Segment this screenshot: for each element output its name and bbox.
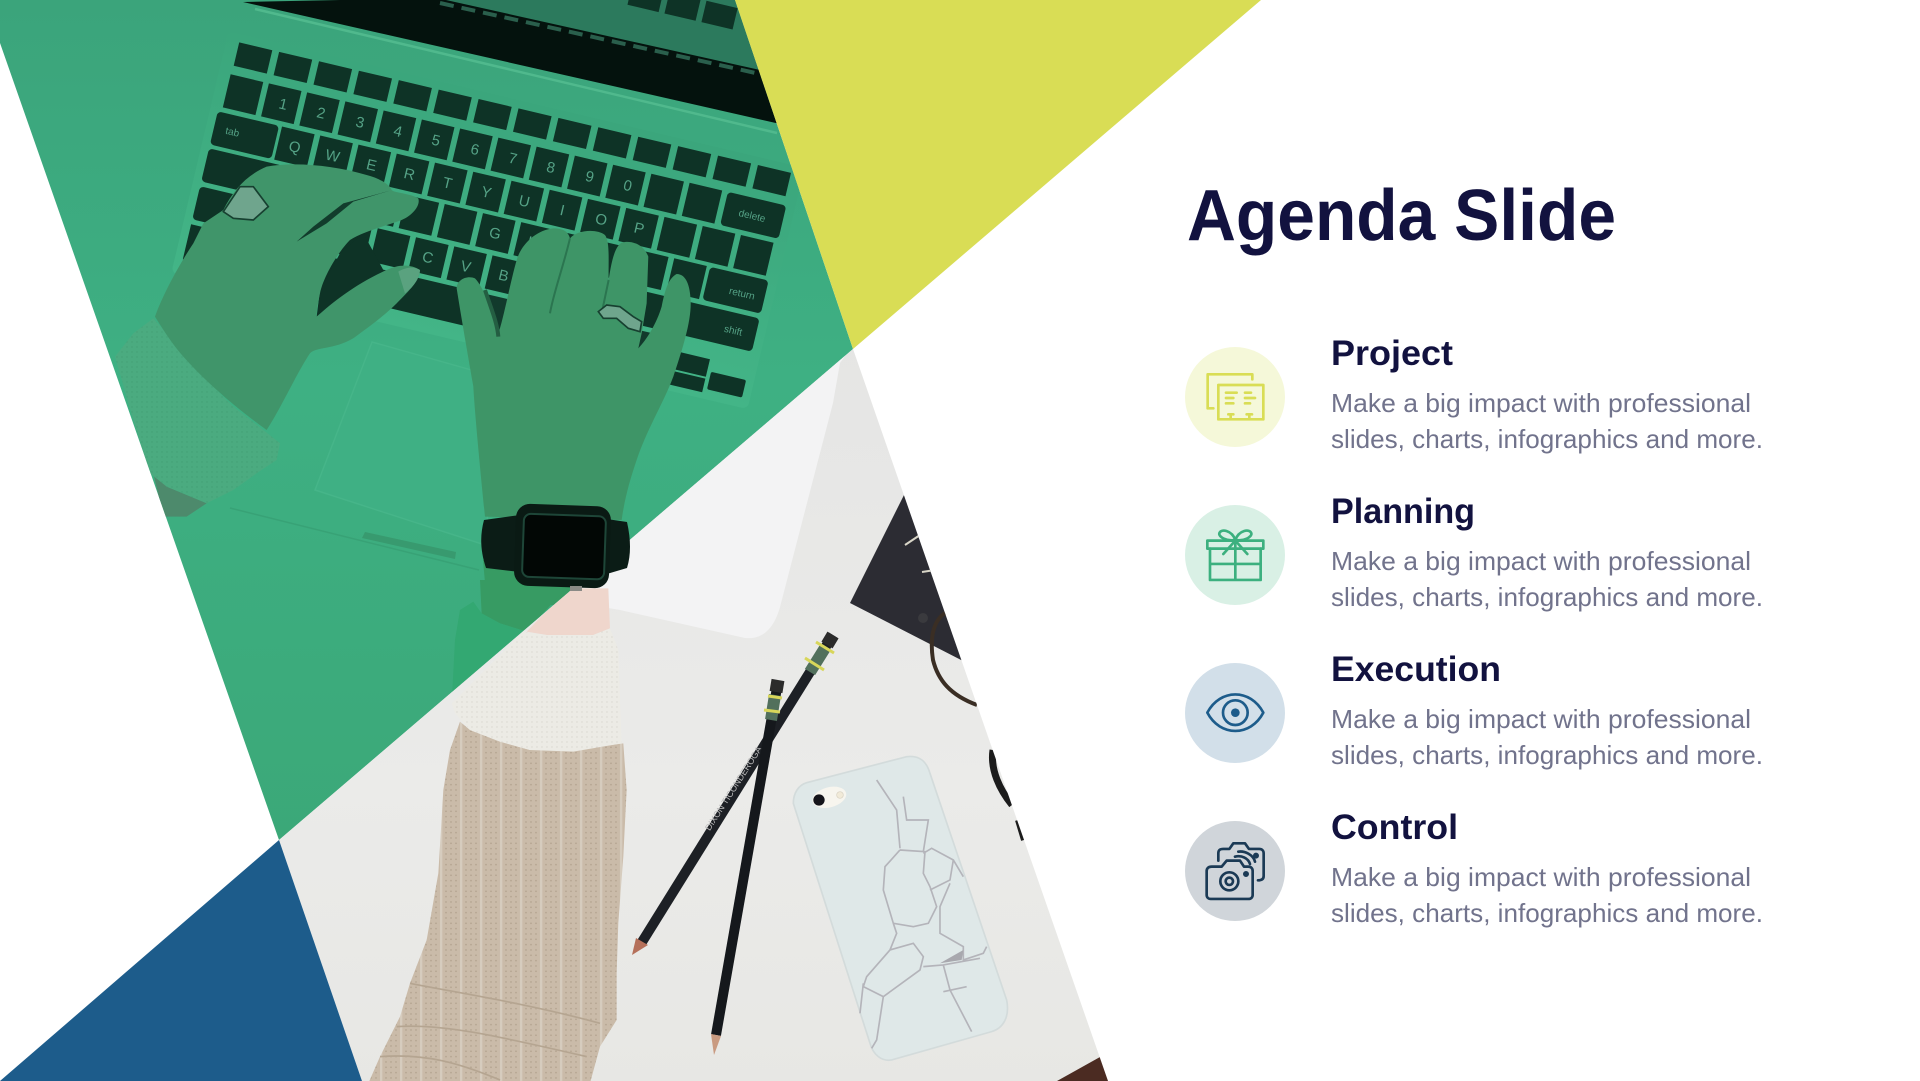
left hand — [155, 164, 420, 430]
left ring — [223, 187, 268, 220]
icon: project cards — [1185, 347, 1285, 447]
description: Planning: slides, charts, infographics and more. — [1331, 582, 1763, 612]
icon: cameras — [1185, 821, 1285, 921]
laptop screen hinge band — [243, 0, 780, 133]
heading: Planning: Planning — [1331, 492, 1475, 531]
green wrist and cuff — [452, 580, 550, 692]
keycap letters: return — [728, 286, 756, 303]
pencil 1: DIXON TICONDEROGA — [703, 744, 764, 832]
smartwatch — [481, 503, 630, 591]
keycap letters: shift — [723, 324, 743, 339]
laptop front edge — [230, 508, 479, 570]
brown desk object corner — [1057, 1057, 1108, 1081]
keycap letters: 1234567890 — [277, 95, 634, 195]
keycap letters — [226, 99, 765, 336]
agenda item: Execution — [1185, 650, 1763, 770]
description: Planning: Make a big impact with professional — [1331, 546, 1751, 576]
pencil 2 — [711, 680, 782, 1055]
icon: eye — [1185, 663, 1285, 763]
heading: Project: Project — [1331, 334, 1453, 373]
heading: Execution: Execution — [1331, 650, 1501, 689]
left sleeve — [115, 318, 280, 517]
title: Agenda Slide — [1187, 176, 1616, 256]
phone with marble case — [793, 756, 1008, 1060]
keycap letters: delete — [737, 208, 767, 225]
description: Planning — [1331, 546, 1763, 612]
description: Control: slides, charts, infographics and more. — [1331, 898, 1763, 928]
forearm below watch — [483, 560, 570, 605]
panel: natural colour lower photo section — [279, 349, 1108, 1081]
blue triangle — [0, 840, 362, 1081]
keycap letters: QWERTYUIOP — [287, 138, 646, 238]
description: Project: slides, charts, infographics and more. — [1331, 424, 1763, 454]
yellow triangle — [735, 0, 1261, 349]
agenda item: Project — [1185, 334, 1763, 454]
panel: green tinted photo of hands typing on laptop — [0, 0, 900, 850]
keyboard — [171, 32, 805, 409]
agenda item: Control — [1185, 808, 1763, 928]
description: Execution — [1331, 704, 1763, 770]
arm: skin, tan sleeve and white cuff — [368, 588, 627, 1081]
agenda item: Planning — [1185, 492, 1763, 612]
pencil 1 — [632, 635, 834, 955]
icon: gift box — [1185, 505, 1285, 605]
heading: Control: Control — [1331, 808, 1458, 847]
keycap letters: CVBN — [420, 249, 549, 294]
black notebook — [850, 495, 962, 660]
trackpad outline — [315, 342, 500, 545]
description: Project — [1331, 388, 1763, 454]
keycap letters: GHJ — [487, 224, 577, 261]
description: Control — [1331, 862, 1763, 928]
right hand — [457, 228, 691, 520]
laptop corner — [582, 356, 845, 638]
keycap letters: tab — [224, 126, 241, 140]
description: Execution: Make a big impact with professional — [1331, 704, 1751, 734]
description: Project: Make a big impact with professional — [1331, 388, 1751, 418]
description: Control: Make a big impact with professional — [1331, 862, 1751, 892]
description: Execution: slides, charts, infographics and more. — [1331, 740, 1763, 770]
glasses — [918, 613, 1024, 840]
right ring — [598, 305, 642, 332]
